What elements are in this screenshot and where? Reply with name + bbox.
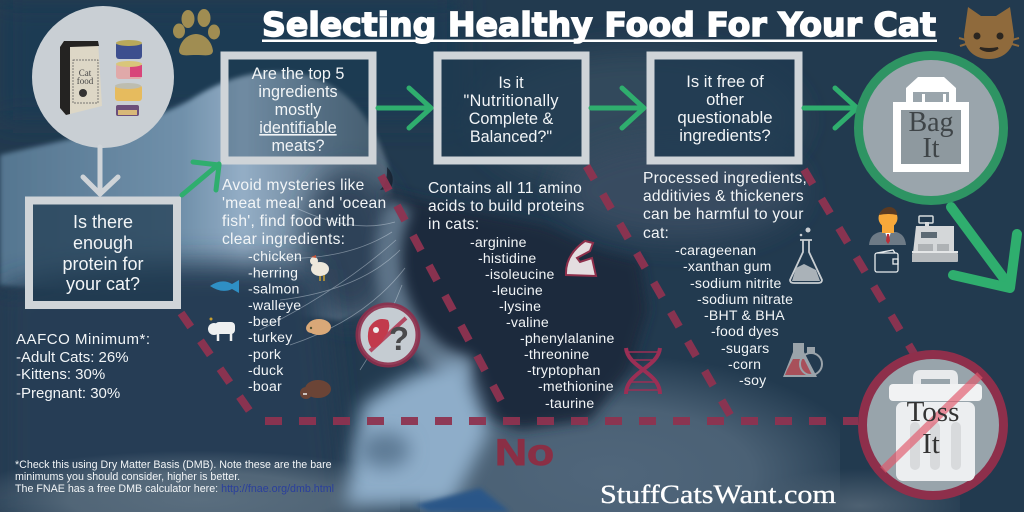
list: questionable ingredients: -sodium nitrate (697, 291, 793, 307)
box: is there enough protein: your cat? (66, 274, 140, 294)
list: amino acids: -valine (506, 314, 549, 330)
icon: shopping bag (897, 77, 965, 168)
footnote: The FNAE has a free DMB calculator here: http://fnae.org/dmb.html (15, 483, 334, 495)
box: is there enough protein: enough (73, 233, 133, 253)
icon: flask (790, 228, 822, 283)
text: contains all amino acids: in cats: (428, 216, 479, 233)
list: meats (248, 248, 302, 394)
list: amino acids: -tryptophan (527, 362, 600, 378)
list: amino acids: -arginine (470, 234, 527, 250)
footnote: minimums you should consider, higher is better. (15, 471, 240, 483)
box: complete and balanced: Balanced?" (470, 128, 552, 146)
icon: flasks with red liquid (783, 343, 822, 377)
list: questionable ingredients: -sugars (721, 340, 769, 356)
arrow: food to protein (83, 147, 118, 194)
list: questionable ingredients: -BHT & BHA (704, 307, 785, 323)
icon: mystery meat: ? (389, 320, 409, 357)
text: processed ingredients: cat: (643, 225, 669, 242)
box: complete and balanced: "Nutritionally (464, 92, 559, 110)
toss it label: Toss (907, 396, 959, 428)
box: top 5 ingredients: mostly (275, 101, 322, 119)
green arrows (182, 88, 1017, 288)
list: meats: -duck (248, 362, 284, 378)
list: amino acids: -leucine (492, 282, 543, 298)
icon: muscle (566, 241, 596, 276)
text: avoid mysteries: fish', find food with (222, 213, 355, 230)
text: AAFCO minimums: -Kittens: 30% (16, 366, 105, 383)
list: questionable ingredients: -carageenan (675, 242, 756, 258)
arrow: balanced to free (591, 88, 644, 128)
text: processed ingredients: Processed ingredients, (643, 170, 807, 187)
list: questionable ingredients: -soy (739, 372, 767, 388)
icon: fish (210, 280, 239, 293)
icon: trash can (889, 370, 982, 481)
arrow: bag it exit (951, 207, 1017, 288)
list: amino acids: -isoleucine (485, 266, 555, 282)
list: amino acids: -taurine (545, 395, 594, 411)
box: is there enough protein: protein for (62, 254, 144, 274)
icon: mystery meat (358, 305, 418, 365)
text: processed ingredients: can be harmful to your (643, 206, 804, 223)
box: free of questionable ingredients (650, 56, 798, 160)
list: meats: -pork (248, 346, 282, 362)
text: AAFCO minimums (16, 331, 150, 402)
list: amino acids (470, 234, 614, 411)
box: free of questionable ingredients: ingredients? (679, 126, 771, 145)
box: top 5 ingredients: Are the top 5 (252, 65, 344, 83)
list: questionable ingredients: -food dyes (711, 323, 779, 339)
arrow: ingredients to balanced (378, 88, 431, 128)
text: processed ingredients (643, 170, 807, 242)
toss it label: It (922, 428, 940, 460)
dashed paths to no (181, 166, 916, 421)
icon: cow (208, 318, 235, 341)
box: free of questionable ingredients: Is it free of (686, 72, 764, 91)
text: AAFCO minimums: AAFCO Minimum*: (16, 331, 150, 348)
box: free of questionable ingredients: other (706, 90, 744, 109)
toss it circle (862, 354, 1004, 496)
text: avoid mysteries: Avoid mysteries like (222, 177, 365, 194)
text: avoid mysteries: 'meat meal' and 'ocean (222, 195, 386, 212)
food photo circle (32, 6, 174, 148)
list: meats: -herring (248, 264, 298, 280)
text: AAFCO minimums: -Adult Cats: 26% (16, 349, 129, 366)
text: avoid mysteries: clear ingredients: (222, 231, 345, 248)
list: meats: -walleye (248, 297, 301, 313)
icon: cat food bag: food (77, 76, 94, 86)
icon: wallet (875, 250, 898, 272)
title: Selecting Healthy Food For Your Cat (262, 5, 936, 44)
list: questionable ingredients (675, 242, 793, 388)
box: top 5 ingredients: identifiable (259, 119, 337, 137)
list: amino acids: -lysine (499, 298, 541, 314)
list: meats: -turkey (248, 329, 293, 345)
box: free of questionable ingredients: questionable (677, 108, 773, 127)
arrow: free to bag it (804, 88, 857, 128)
box: top 5 ingredients (224, 56, 372, 160)
icon: paw print (173, 9, 220, 55)
toss it label (907, 396, 959, 460)
list: amino acids: -threonine (524, 346, 589, 362)
icon: shopper (869, 207, 906, 245)
bag it circle: Bag (908, 107, 954, 138)
box: is there enough protein: Is there (73, 212, 133, 232)
icon: pig (306, 319, 331, 335)
list: meats: -boar (248, 378, 282, 394)
box: top 5 ingredients: meats? (271, 137, 325, 155)
label: no: No (495, 432, 554, 473)
icon: cat face (959, 7, 1019, 59)
icon: cat food bag (60, 41, 102, 115)
box: is there enough protein (29, 200, 177, 305)
website credit: StuffCatsWant.com (600, 480, 836, 509)
icon: cat food bag: Cat (79, 68, 92, 78)
no slash (883, 375, 980, 470)
text: contains all amino acids (428, 180, 585, 233)
list: amino acids: -methionine (538, 378, 614, 394)
text: processed ingredients: additivies & thickeners (643, 188, 804, 205)
box: complete and balanced (438, 56, 586, 160)
icon: cat food cans (115, 40, 142, 116)
bag it circle: It (922, 133, 940, 164)
icon: cash register (912, 216, 958, 262)
list: questionable ingredients: -corn (728, 356, 761, 372)
list: meats: -salmon (248, 280, 300, 296)
box: top 5 ingredients: ingredients (258, 83, 338, 101)
text: avoid mysteries (222, 177, 386, 248)
list: questionable ingredients: -xanthan gum (683, 258, 772, 274)
icon: chicken (310, 255, 329, 281)
text: contains all amino acids: Contains all 11 amino (428, 180, 582, 197)
list: meats: -beef (248, 313, 281, 329)
box: complete and balanced: Is it (498, 74, 524, 92)
icon: dna helix (626, 348, 660, 394)
box: complete and balanced: Complete & (469, 110, 553, 128)
list: meats: -chicken (248, 248, 302, 264)
list: questionable ingredients: -sodium nitrite (690, 275, 782, 291)
footnote: *Check this using Dry Matter Basis (DMB). Note these are the bare (15, 459, 332, 471)
icon: boar (300, 380, 331, 399)
footnote (15, 459, 334, 495)
text: AAFCO minimums: -Pregnant: 30% (16, 385, 120, 402)
list: amino acids: -phenylalanine (520, 330, 614, 346)
text: contains all amino acids: acids to build proteins (428, 198, 585, 215)
list: amino acids: -histidine (478, 250, 536, 266)
arrow: protein to ingredients (182, 162, 219, 195)
bag it circle (858, 56, 1004, 200)
